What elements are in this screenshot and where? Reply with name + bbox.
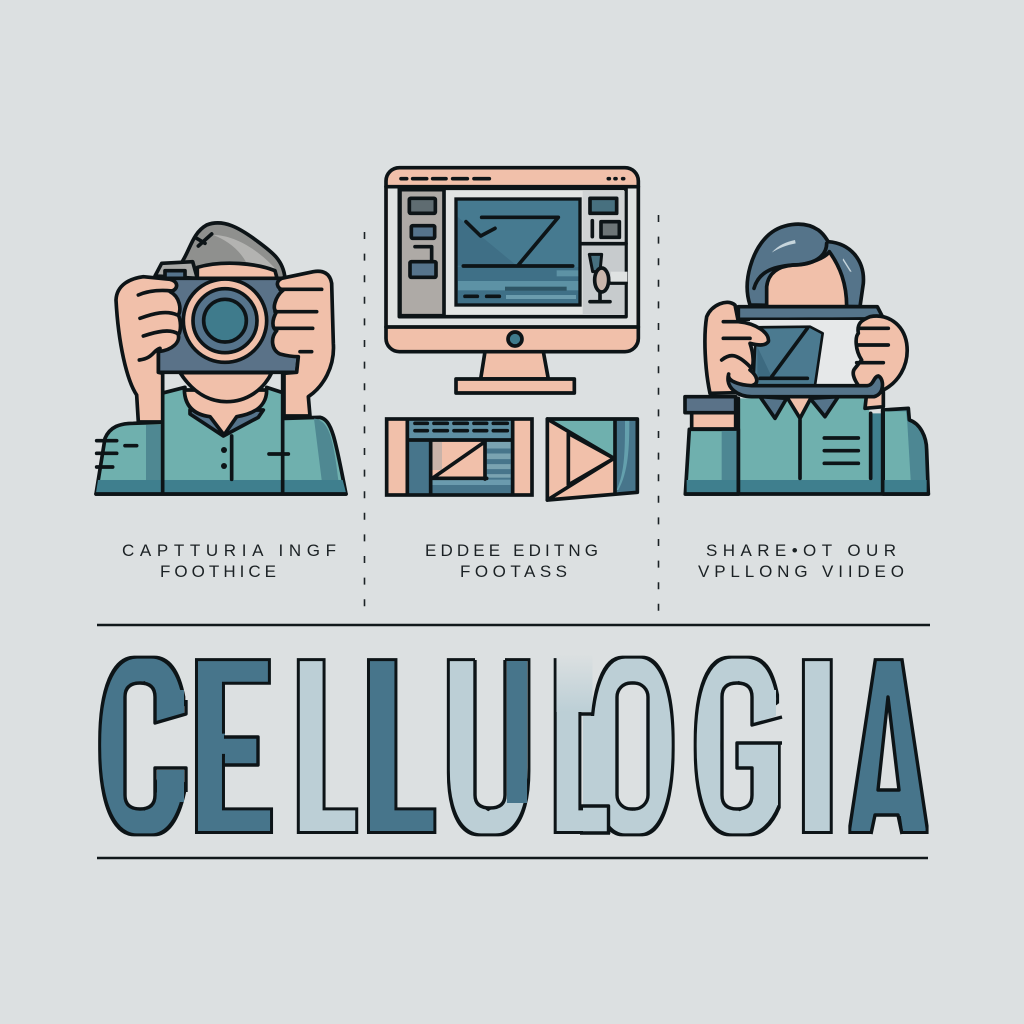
E middle bar bbox=[225, 726, 273, 736]
caption: editing footage: EDDEE EDITNG bbox=[425, 541, 598, 560]
editor window bbox=[399, 188, 627, 317]
C terminals and counter bbox=[156, 690, 184, 802]
caption: capturing footage bbox=[122, 541, 336, 581]
forehead bbox=[197, 263, 277, 279]
neck and collar bbox=[184, 390, 267, 479]
title: CELLULOGIA: E bbox=[196, 609, 268, 882]
video preview bbox=[456, 199, 580, 305]
title: CELLULOGIA: U bbox=[448, 610, 529, 883]
chin bbox=[180, 373, 272, 402]
play icon thumbnail bbox=[547, 419, 637, 500]
title: CELLULOGIA: L bbox=[557, 609, 603, 882]
title: CELLULOGIA bbox=[103, 609, 919, 883]
film strip thumbnail bbox=[387, 419, 532, 495]
caption: editing footage bbox=[425, 541, 598, 581]
cuff bbox=[685, 397, 736, 429]
left tool panel bbox=[400, 190, 444, 316]
A counter and legs bbox=[876, 770, 902, 816]
title: CELLULOGIA: L bbox=[299, 611, 351, 883]
camera lens bbox=[183, 279, 267, 362]
caption: editing footage: FOOTASS bbox=[460, 562, 567, 581]
title: CELLULOGIA: G bbox=[698, 610, 778, 882]
hair bbox=[180, 223, 285, 278]
viewfinder bbox=[155, 262, 197, 278]
caption: capturing footage: FOOTHICE bbox=[160, 562, 276, 581]
L and O join bbox=[583, 716, 611, 806]
caption: sharing video bbox=[698, 541, 904, 581]
title: CELLULOGIA: C bbox=[103, 609, 180, 882]
sleeve marks bbox=[97, 441, 288, 467]
title: CELLULOGIA: A bbox=[858, 610, 919, 883]
caption: sharing video: VPLLONG VIIDEO bbox=[698, 562, 904, 581]
monitor stand bbox=[456, 352, 574, 393]
caption: capturing footage: CAPTTURIA INGF bbox=[122, 541, 336, 560]
phone bbox=[738, 307, 883, 387]
O counter bbox=[617, 683, 648, 809]
right tool panel bbox=[582, 191, 627, 315]
phone lower edge bbox=[728, 374, 882, 397]
hair bbox=[747, 224, 863, 307]
left hand bbox=[116, 277, 180, 422]
figure: person sharing video on phone bbox=[685, 224, 928, 494]
figure: person capturing with camera bbox=[96, 223, 346, 494]
right hand bbox=[273, 271, 333, 416]
left hand bbox=[705, 302, 768, 393]
U counter and dark stem bbox=[475, 658, 505, 808]
title: CELLULOGIA: I bbox=[801, 610, 833, 882]
monitor frame bbox=[386, 168, 638, 352]
caption: sharing video: SHARE•OT OUR bbox=[706, 541, 896, 560]
collar bbox=[760, 397, 838, 418]
right hand bbox=[853, 316, 907, 408]
G terminals and counter bbox=[738, 690, 778, 805]
shirt bbox=[685, 398, 928, 494]
title: CELLULOGIA: O bbox=[595, 610, 669, 883]
figure: monitor with video editor bbox=[386, 168, 638, 500]
camera body bbox=[158, 278, 298, 372]
shirt bbox=[96, 373, 346, 494]
title: CELLULOGIA: L bbox=[368, 610, 430, 883]
